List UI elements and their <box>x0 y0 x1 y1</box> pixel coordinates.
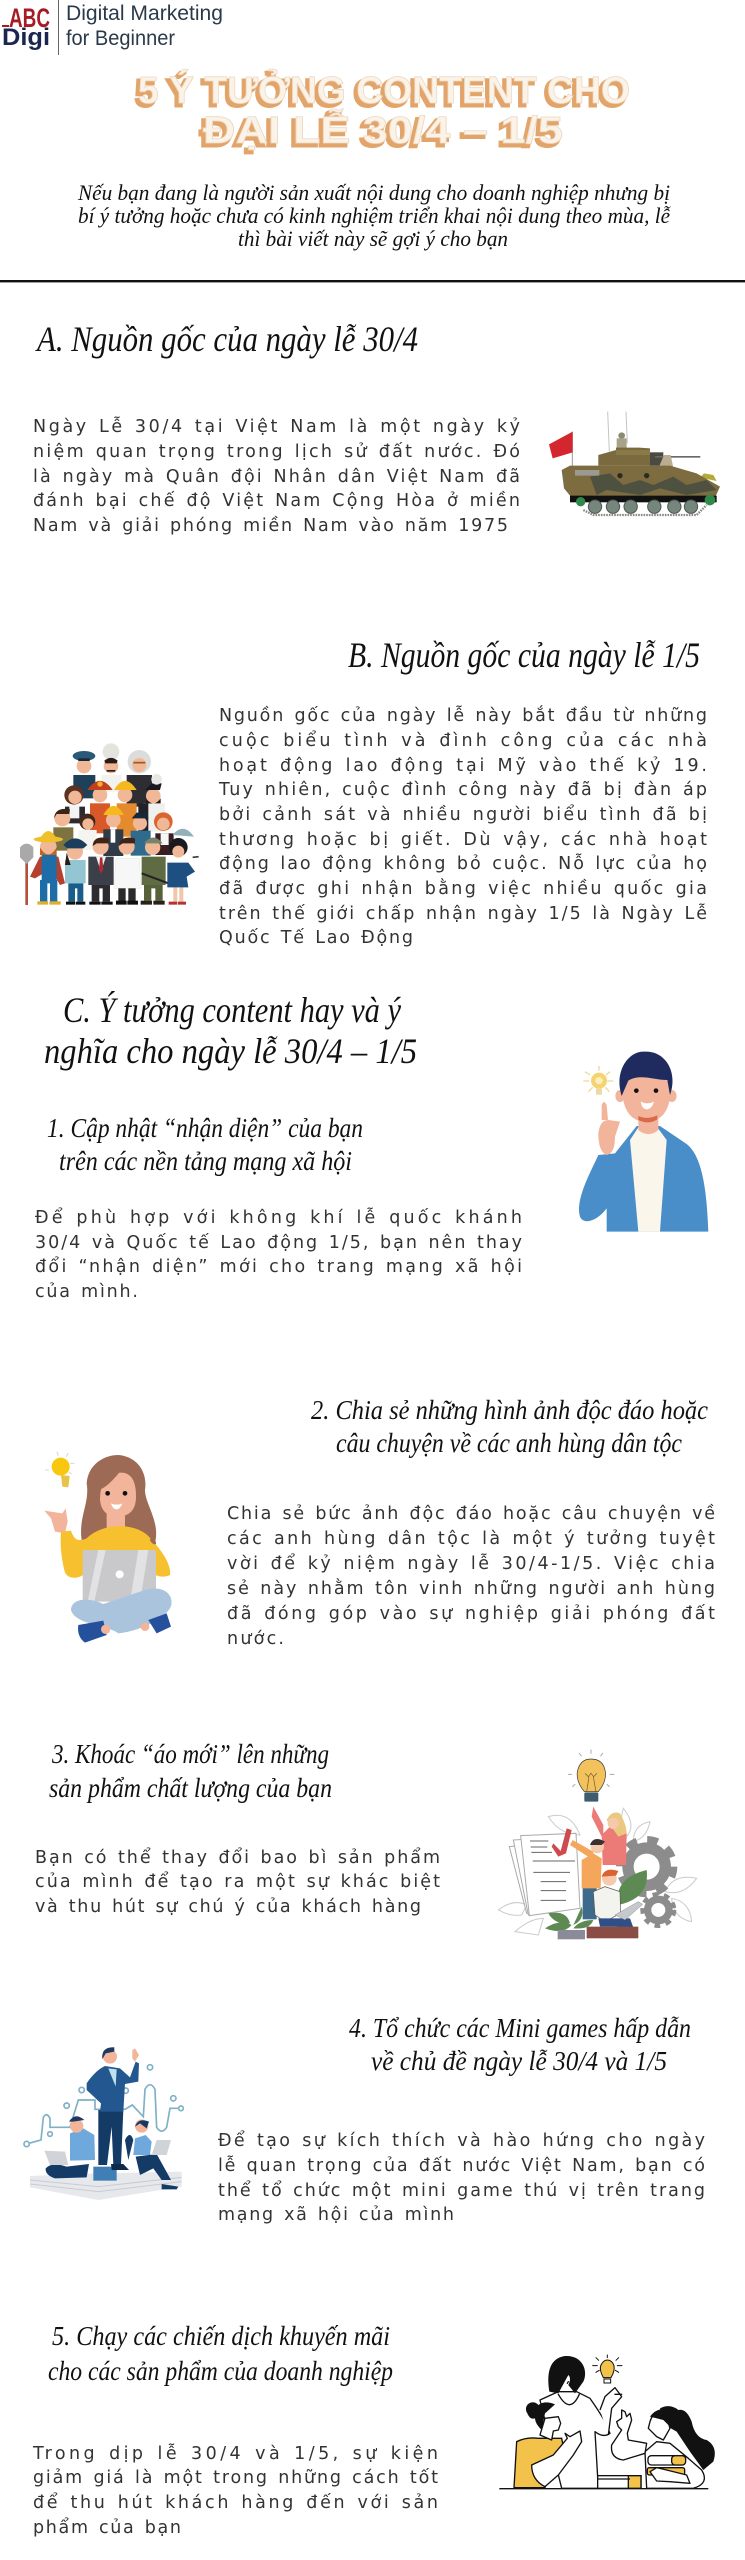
text block 5: Trong dịp lễ 30/4 và 1/5, sự kiện <box>32 2443 438 2464</box>
text block B: đã được ghi nhận bằng việc nhiều quốc gia <box>219 878 707 899</box>
text block B: trên thế giới chấp nhận ngày 1/5 là Ngày Lễ <box>219 903 707 924</box>
title: 5 Ý TƯỞNG CONTENT CHO <box>135 71 627 115</box>
text block 4: lễ quan trọng của đất nước Việt Nam, bạn có <box>218 2155 705 2176</box>
text block 2: các anh hùng dân tộc là một ý tưởng tuyệt <box>227 1529 715 1549</box>
subheading 2 <box>311 1395 708 1458</box>
intro text <box>77 180 671 251</box>
title: ĐẠI LỄ 30/4 – 1/5 <box>200 111 560 155</box>
icon: group of workers <box>20 743 199 905</box>
logo: ABC Digi: Digital Marketing <box>66 2 223 25</box>
text block 2: vời để kỷ niệm ngày lễ 30/4-1/5. Việc chia <box>227 1553 715 1574</box>
text block B: Quốc Tế Lao Động <box>219 927 413 948</box>
text block A: Ngày Lễ 30/4 tại Việt Nam là một ngày kỷ <box>33 416 520 437</box>
text block 3: Bạn có thể thay đổi bao bì sản phẩm <box>35 1847 440 1868</box>
heading C: nghĩa cho ngày lễ 30/4 – 1/5 <box>44 1031 417 1071</box>
text block 5: phẩm của bạn <box>33 2517 181 2538</box>
subheading 1: 1. Cập nhật “nhận diện” của bạn <box>47 1113 363 1143</box>
logo: ABC Digi <box>2 0 223 55</box>
icon: business team on platform <box>24 2047 183 2200</box>
intro text: Nếu bạn đang là người sản xuất nội dung cho doanh nghiệp nhưng bị <box>77 180 670 205</box>
text block B: bởi cảnh sát và nhiều người biểu tình đã bị <box>219 804 707 825</box>
title <box>135 68 630 155</box>
text block 2: nước. <box>227 1629 284 1649</box>
text block 3 <box>35 1847 440 1917</box>
text block 4 <box>218 2130 705 2225</box>
text block 5: để thu hút khách hàng đến với sản <box>33 2492 438 2513</box>
icon: tank with red flag <box>549 412 720 515</box>
text block 4: Để tạo sự kích thích và hào hứng cho ngày <box>218 2130 705 2151</box>
gears <box>620 1840 674 1926</box>
intro text: thì bài viết này sẽ gợi ý cho bạn <box>238 226 508 251</box>
text block 1: của mình. <box>35 1282 138 1302</box>
icon: man with light bulb <box>579 1052 708 1232</box>
subheading 4: 4. Tổ chức các Mini games hấp dẫn <box>349 2013 691 2043</box>
text block 4: mạng xã hội của mình <box>218 2205 454 2225</box>
subheading 4: về chủ đề ngày lễ 30/4 và 1/5 <box>371 2046 667 2076</box>
second row <box>64 774 165 837</box>
text block A <box>33 416 520 536</box>
subheading 1: trên các nền tảng mạng xã hội <box>59 1146 352 1176</box>
text block 1: đổi “nhận diện” mới cho trang mạng xã hội <box>35 1256 522 1277</box>
text block B: Nguồn gốc của ngày lễ này bắt đầu từ những <box>219 705 707 726</box>
text block 2 <box>227 1503 715 1649</box>
intro text: bí ý tưởng hoặc chưa có kinh nghiệm triển khai nội dung theo mùa, lễ <box>78 203 671 228</box>
subheading 3: sản phẩm chất lượng của bạn <box>49 1773 332 1803</box>
back row <box>73 743 152 807</box>
text block 1 <box>35 1207 522 1302</box>
heading C: C. Ý tưởng content hay và ý <box>63 990 401 1030</box>
heading C <box>44 990 417 1071</box>
text block 2: Chia sẻ bức ảnh độc đáo hoặc câu chuyện về <box>227 1503 715 1524</box>
third row <box>53 806 194 856</box>
logo: ABC Digi: for Beginner <box>66 27 175 50</box>
subheading 3 <box>49 1739 332 1803</box>
front row <box>20 831 199 905</box>
logo: ABC Digi: Digi <box>2 24 50 51</box>
text block A: là ngày mà Quân đội Nhân dân Việt Nam đã <box>33 467 520 487</box>
icon: three women with books and bulb <box>499 2355 715 2489</box>
logo: ABC Digi: ABC <box>9 3 50 33</box>
text block B: hoạt động lao động tại Mỹ vào thế kỷ 19. <box>219 755 707 776</box>
text block 3: của mình để tạo ra một sự khác biệt <box>35 1871 440 1892</box>
text block 2: sẻ này nhằm tôn vinh những người anh hùng <box>227 1578 715 1599</box>
text block A: niệm quan trọng trong lịch sử đất nước. Đó <box>33 441 520 462</box>
heading A: A. Nguồn gốc của ngày lễ 30/4 <box>35 319 418 359</box>
text block B: Tuy nhiên, cuộc đình công này đã bị đàn áp <box>218 780 707 800</box>
text block B: cuộc biểu tình và đình công của các nhà <box>219 730 707 751</box>
subheading 2: 2. Chia sẻ những hình ảnh độc đáo hoặc <box>311 1395 708 1425</box>
subheading 1 <box>47 1113 363 1176</box>
subheading 4 <box>349 2013 691 2076</box>
text block 1: Để phù hợp với không khí lễ quốc khánh <box>35 1207 522 1228</box>
text block 5: giảm giá là một trong những cách tốt <box>33 2467 438 2488</box>
text block A: Nam và giải phóng miền Nam vào năm 1975 <box>33 515 508 536</box>
title: 5 Ý TƯỞNG CONTENT CHO <box>138 68 630 112</box>
text block A: đánh bại chế độ Việt Nam Cộng Hòa ở miền <box>33 490 520 511</box>
subheading 5: cho các sản phẩm của doanh nghiệp <box>48 2356 393 2386</box>
text block 2: đã đóng góp vào sự nghiệp giải phóng đất <box>227 1603 715 1624</box>
title: ĐẠI LỄ 30/4 – 1/5 <box>203 108 563 152</box>
text block B: động lao động không bỏ cuộc. Nỗ lực của họ <box>219 853 707 874</box>
subheading 3: 3. Khoác “áo mới” lên những <box>51 1739 329 1769</box>
text block B: thương hoặc bị giết. Dù vậy, các nhà hoạt <box>219 829 707 850</box>
text block 4: thể tổ chức một mini game thú vị trên trang <box>218 2180 705 2201</box>
text block 3: và thu hút sự chú ý của khách hàng <box>35 1897 421 1917</box>
icon: team with documents, gears and bulb <box>498 1750 697 1939</box>
subheading 5 <box>48 2321 393 2386</box>
text block 1: 30/4 và Quốc tế Lao động 1/5, bạn nên thay <box>35 1232 522 1253</box>
text block 5 <box>32 2443 438 2538</box>
subheading 5: 5. Chạy các chiến dịch khuyến mãi <box>52 2321 390 2351</box>
icon: woman with laptop <box>44 1452 172 1643</box>
text block B <box>218 705 707 948</box>
subheading 2: câu chuyện về các anh hùng dân tộc <box>336 1428 682 1458</box>
